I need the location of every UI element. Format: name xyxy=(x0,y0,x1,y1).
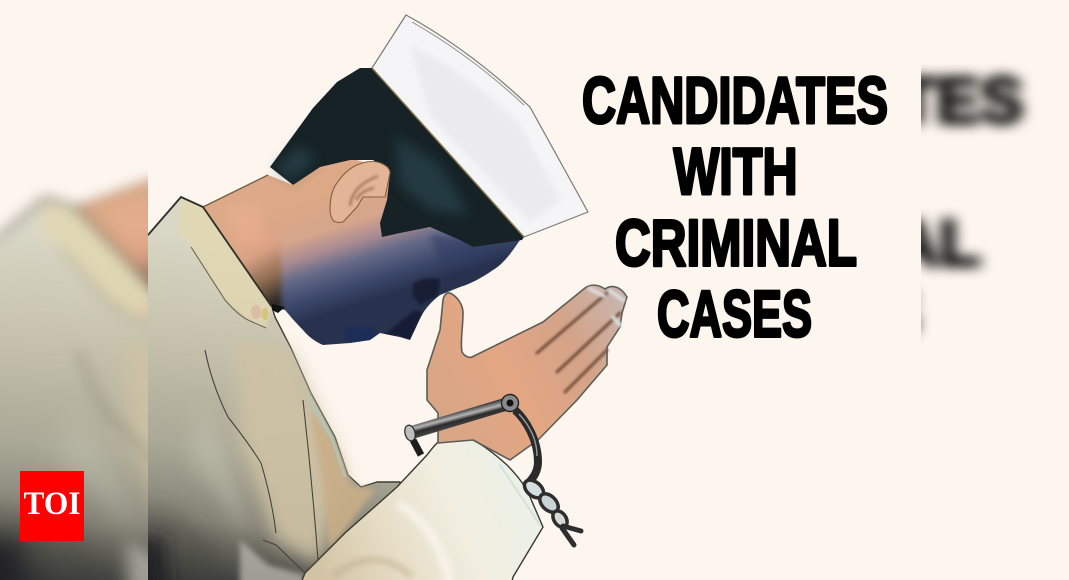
kurta shading folds xyxy=(100,340,375,580)
collar xyxy=(178,197,272,328)
white cap xyxy=(372,15,588,237)
chain xyxy=(521,477,581,545)
headline: WITH xyxy=(674,135,798,208)
kurta body xyxy=(100,197,400,580)
sleeve folds xyxy=(335,465,540,580)
headline: CANDIDATES xyxy=(582,64,888,137)
head, face and neck xyxy=(170,150,540,355)
finger lines xyxy=(537,293,620,392)
hair xyxy=(270,68,524,247)
sleeve xyxy=(298,437,543,580)
collar edge line xyxy=(148,197,272,307)
headline: CRIMINAL xyxy=(615,206,857,280)
ear xyxy=(330,161,390,222)
headline: CASES xyxy=(657,278,812,350)
headline xyxy=(582,64,888,350)
blurred stretched copy of the artwork at both sides: CASES xyxy=(704,277,918,351)
TOI logo: TOI xyxy=(24,486,80,522)
TOI logo xyxy=(20,471,84,541)
praying hands xyxy=(427,285,627,460)
garment crease lines xyxy=(205,350,318,573)
illustration: bowing handcuffed politician xyxy=(100,15,627,580)
neck outline xyxy=(203,175,268,207)
main panel xyxy=(148,0,921,580)
hair highlights xyxy=(275,135,470,215)
handcuff xyxy=(403,394,538,485)
